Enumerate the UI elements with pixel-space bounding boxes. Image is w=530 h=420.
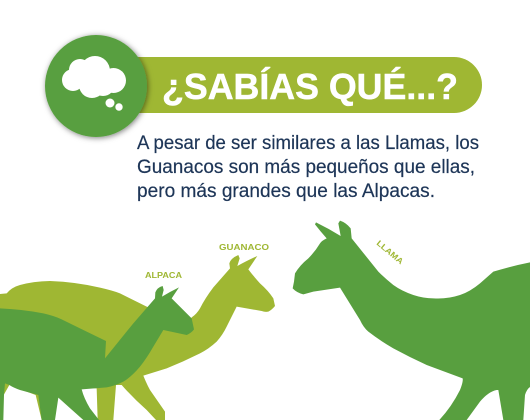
silhouette: llama <box>293 221 530 420</box>
body text: A pesar de ser similares a las Llamas, los <box>137 133 479 154</box>
silhouette: alpaca <box>0 286 194 420</box>
label: llama: LLAMA <box>375 239 405 266</box>
label: guanaco: GUANACO <box>219 242 269 252</box>
icon: cloud <box>62 56 126 111</box>
body text: Guanacos son más pequeños que ellas, <box>137 157 475 178</box>
body text: pero más grandes que las Alpacas. <box>137 181 435 202</box>
silhouette: guanaco <box>0 255 275 420</box>
icon badge: thought cloud <box>45 35 147 137</box>
label: alpaca: ALPACA <box>145 271 182 280</box>
body text <box>137 133 479 202</box>
title banner <box>120 57 482 113</box>
title: ¿SABÍAS QUÉ...? <box>162 66 458 107</box>
